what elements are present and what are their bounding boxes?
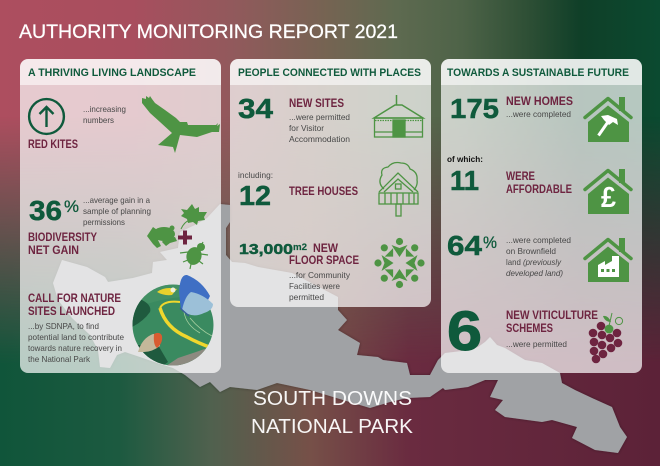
- icon: house with hammer: [585, 97, 631, 142]
- label: South Downs National Park: SOUTH DOWNS: [253, 388, 412, 410]
- stat: 175: 175: [450, 93, 499, 124]
- stat: 64 percent: [447, 230, 497, 261]
- label: new homes: NEW HOMES: [506, 96, 573, 108]
- label: call for nature sites launched: CALL FOR NATURE: [28, 293, 121, 305]
- label: South Downs National Park: NATIONAL PARK: [251, 416, 414, 438]
- label: new sites: NEW SITES: [289, 98, 344, 110]
- label: were affordable: WERE: [506, 171, 535, 183]
- icon: up arrow in circle: [29, 99, 64, 134]
- title: AUTHORITY MONITORING REPORT 2021: [19, 22, 398, 43]
- label: biodiversity net gain: BIODIVERSITY: [28, 232, 97, 244]
- text: average gain: sample of planning: [83, 207, 151, 216]
- label: new floor space: [289, 243, 359, 267]
- text: average gain: [83, 196, 151, 227]
- label: tree houses: TREE HOUSES: [289, 186, 358, 198]
- text: visitor accommodation: Accommodation: [289, 135, 350, 144]
- icon: maple leaf: [181, 204, 207, 229]
- heading: thriving landscape: A THRIVING LIVING LANDSCAPE: [28, 67, 196, 79]
- stat: 36 percent: [29, 195, 79, 226]
- text: average gain: permissions: [83, 218, 125, 227]
- text: increasing numbers: [83, 105, 126, 125]
- stat: 64 percent: 64: [447, 230, 482, 261]
- stat: 13,000 m2: m2: [293, 242, 307, 252]
- label: call for nature sites launched: SITES LAUNCHED: [28, 306, 115, 318]
- panel: people connected with places: [230, 59, 431, 307]
- text: visitor accommodation: for Visitor: [289, 124, 324, 133]
- text: brownfield: land (previously: [506, 258, 562, 267]
- stat: 6: 6: [447, 299, 482, 362]
- text: average gain: ...average gain in a: [83, 196, 150, 205]
- icon: robin: [138, 333, 162, 352]
- label: new floor space: NEW: [313, 243, 338, 255]
- text: call for nature description: [28, 322, 124, 364]
- text: community facilities: [289, 271, 351, 302]
- label: were affordable: AFFORDABLE: [506, 184, 572, 196]
- text: brownfield: [506, 236, 571, 278]
- illustration: robin and butterfly circle: [132, 275, 214, 366]
- stat: 13,000 m2: 13,000: [239, 241, 293, 258]
- text: call for nature description: ...by SDNPA, to find: [28, 322, 99, 331]
- stat: 12: 12: [239, 180, 271, 211]
- text: visitor accommodation: ...were permitted: [289, 113, 350, 122]
- text: call for nature description: towards nature recovery in: [28, 344, 122, 353]
- icon: house with pound sign: [585, 169, 631, 214]
- stat: 36 percent: 36: [29, 195, 62, 226]
- heading: people connected: PEOPLE CONNECTED WITH PLACES: [238, 67, 421, 79]
- panel: a thriving living landscape: [20, 59, 221, 373]
- map: South Downs National Park silhouette: [53, 204, 627, 453]
- icon: red kite bird: [142, 96, 220, 153]
- text: increasing numbers: numbers: [83, 116, 114, 125]
- label: red kites: RED KITES: [28, 139, 78, 151]
- label: biodiversity net gain: [28, 232, 97, 257]
- label: South Downs National Park: [251, 388, 414, 438]
- stat: 64 percent: %: [483, 233, 497, 252]
- text: brownfield: developed land): [506, 269, 563, 278]
- text: community facilities: permitted: [289, 293, 324, 302]
- text: call for nature description: the National Park: [28, 355, 91, 364]
- text: community facilities: Facilities were: [289, 282, 340, 291]
- icon: yurt: [374, 95, 423, 137]
- icon: plus sign: [178, 230, 192, 244]
- text: were completed: ...were completed: [506, 110, 571, 119]
- icon: house with pound sign: £: [601, 182, 616, 214]
- label: new floor space: FLOOR SPACE: [289, 255, 359, 267]
- stat: 13,000 m2: [239, 241, 307, 258]
- icon: tree house: [379, 162, 418, 216]
- text: brownfield: ...were completed: [506, 236, 571, 245]
- label: biodiversity net gain: NET GAIN: [28, 245, 79, 257]
- stat: 34: 34: [238, 93, 273, 124]
- text: were permitted: ...were permitted: [506, 340, 567, 349]
- text: increasing numbers: ...increasing: [83, 105, 126, 114]
- label: new viticulture schemes: NEW VITICULTURE: [506, 310, 598, 322]
- icon: grapes: [589, 313, 623, 363]
- label: call for nature sites launched: [28, 293, 121, 318]
- text: brownfield: on Brownfield: [506, 247, 556, 256]
- icon: community circle of people: [374, 238, 425, 288]
- stat: 11: 11: [450, 165, 479, 196]
- text: including: including:: [238, 171, 273, 180]
- text: call for nature description: potential land to contribute: [28, 333, 124, 342]
- text: of which: of which:: [447, 154, 483, 164]
- icon: house with factory: [585, 238, 631, 282]
- label: were affordable: [506, 171, 572, 196]
- icon: blue butterfly: [179, 275, 213, 316]
- icon: frog: [147, 226, 177, 248]
- label: new viticulture schemes: [506, 310, 598, 335]
- heading: sustainable future: TOWARDS A SUSTAINABLE FUTURE: [447, 67, 629, 79]
- stat: 36 percent: %: [64, 197, 79, 216]
- panel: towards a sustainable future: [441, 59, 642, 373]
- icon: beetle: [180, 242, 208, 269]
- text: visitor accommodation: [289, 113, 350, 144]
- label: new viticulture schemes: SCHEMES: [506, 323, 553, 335]
- text: community facilities: ...for Community: [289, 271, 351, 280]
